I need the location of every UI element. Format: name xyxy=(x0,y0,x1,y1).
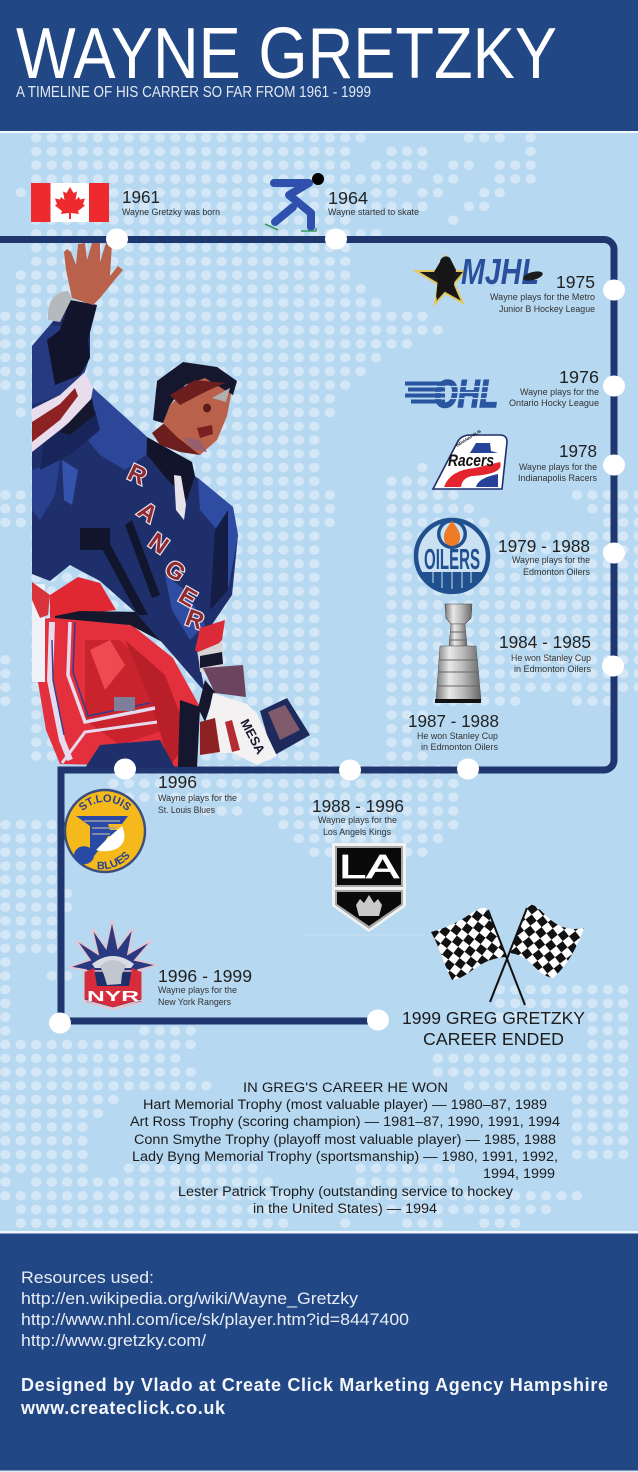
timeline entry: 1975: Junior B Hockey League xyxy=(499,304,595,314)
timeline entry: 1988-1996: 1988 - 1996 xyxy=(312,796,404,816)
logo: Indianapolis Racers xyxy=(433,428,507,489)
dark folds xyxy=(125,520,160,598)
collar xyxy=(147,437,195,500)
timeline entry: 1987-1988: 1987 - 1988 xyxy=(408,711,499,731)
icon: Stanley Cup xyxy=(435,604,481,703)
resources list: http://www.nhl.com/ice/sk/player.htm?id=8447400 xyxy=(21,1311,409,1329)
timeline entry: 1984-1985: in Edmonton Oilers xyxy=(514,664,591,674)
timeline entry: 1978: Indianapolis Racers xyxy=(518,473,597,483)
timeline entry: 1976 xyxy=(509,367,599,408)
text block: awards xyxy=(130,1080,561,1216)
logo: Edmonton Oilers xyxy=(416,519,488,592)
neck and beard xyxy=(152,416,200,455)
logo: Edmonton Oilers: OILERS xyxy=(424,544,480,576)
header banner xyxy=(0,0,638,133)
timeline entry: 1979-1988: 1979 - 1988 xyxy=(498,536,590,556)
timeline entry: 1984-1985 xyxy=(499,632,591,674)
neck lace xyxy=(174,475,186,520)
logo: LA Kings: LA xyxy=(339,848,399,885)
logo: New York Rangers xyxy=(69,920,157,1009)
text block: awards: Lester Patrick Trophy (outstanding service to hockey xyxy=(178,1184,513,1199)
timeline entry: 1976: Ontario Hocky League xyxy=(509,398,599,408)
timeline entry: 1996-1999: 1996 - 1999 xyxy=(158,966,252,986)
resources list xyxy=(21,1269,409,1350)
subtitle: A TIMELINE OF HIS CARRER SO FAR FROM 1961 - 1999 xyxy=(16,84,371,101)
timeline entry: 1996: 1996 xyxy=(158,772,197,792)
face xyxy=(163,377,233,455)
wrist xyxy=(203,665,246,697)
logo: MJHL xyxy=(416,251,544,304)
timeline entry: 1996-1999: New York Rangers xyxy=(158,997,231,1007)
title: WAYNE GRETZKY xyxy=(16,14,557,94)
footer panel xyxy=(0,1231,638,1472)
logo: New York Rangers: NYR xyxy=(87,988,139,1005)
text block: awards: in the United States) — 1994 xyxy=(253,1201,438,1216)
glove label: MESA xyxy=(237,716,269,757)
logo: OHL xyxy=(405,373,498,416)
hip xyxy=(50,577,116,618)
logo: Indianapolis Racers: INDIANAPOLIS xyxy=(455,428,482,448)
timeline entry: 1984-1985: 1984 - 1985 xyxy=(499,632,591,652)
timeline entry: 1978: 1978 xyxy=(559,441,597,461)
sleeve stripes xyxy=(32,372,93,452)
designer credit: www.createclick.co.uk xyxy=(20,1398,226,1418)
timeline entry: 1976: 1976 xyxy=(559,367,599,387)
background panel with dotted world map xyxy=(0,131,638,1233)
sleeve cuff xyxy=(195,620,225,658)
timeline entry: 1996-1999 xyxy=(158,966,252,1007)
timeline entry: 1996: Wayne plays for the xyxy=(158,793,237,803)
timeline entry: 1975: 1975 xyxy=(556,272,595,292)
timeline entry: 1979-1988 xyxy=(498,536,590,577)
resources list: http://www.gretzky.com/ xyxy=(21,1332,206,1350)
player illustration xyxy=(32,243,310,768)
logo: Indianapolis Racers: Racers xyxy=(448,451,494,470)
timeline entry: 1961: 1961 xyxy=(122,187,160,207)
elbow pad xyxy=(48,291,72,322)
text block: awards: IN GREG'S CAREER HE WON xyxy=(243,1080,448,1095)
timeline entry: 1996-1999: Wayne plays for the xyxy=(158,985,237,995)
icon: skater xyxy=(265,173,324,231)
timeline entry: 1996: St. Louis Blues xyxy=(158,805,215,815)
timeline entry: 1987-1988 xyxy=(408,711,499,752)
timeline track xyxy=(0,240,614,1021)
timeline entry: 1961: Wayne Gretzky was born xyxy=(122,207,220,217)
heading: career ended: CAREER ENDED xyxy=(423,1029,564,1049)
waypoint dots xyxy=(49,228,625,1034)
resources list: http://en.wikipedia.org/wiki/Wayne_Gretzky xyxy=(21,1290,359,1308)
jersey lettering: RANGER xyxy=(123,459,207,636)
timeline entry: 1988-1996: Wayne plays for the xyxy=(318,815,397,825)
icon: Canadian flag xyxy=(31,183,109,222)
hair xyxy=(153,362,237,423)
timeline entry: 1979-1988: Edmonton Oilers xyxy=(523,567,590,577)
timeline entry: 1984-1985: He won Stanley Cup xyxy=(511,653,591,663)
side panel xyxy=(32,584,45,682)
shoulder highlight xyxy=(75,388,147,470)
timeline entry: 1979-1988: Wayne plays for the xyxy=(512,555,590,565)
timeline entry: 1964: Wayne started to skate xyxy=(328,207,419,217)
jersey xyxy=(32,300,238,692)
text block: awards: Conn Smythe Trophy (playoff most valuable player) — 1985, 1988 xyxy=(134,1132,556,1147)
forearm xyxy=(47,300,97,385)
timeline entry: 1964: 1964 xyxy=(328,188,368,208)
timeline entry: 1987-1988: in Edmonton Oilers xyxy=(421,742,498,752)
heading: career ended xyxy=(402,1008,585,1049)
timeline entry: 1961 xyxy=(122,187,220,217)
resources list: Resources used: xyxy=(21,1269,154,1287)
divider under LA logo xyxy=(305,934,425,936)
designer credit: Designed by Vlado at Create Click Marketing Agency Hampshire xyxy=(21,1375,608,1395)
timeline entry: 1988-1996: Los Angels Kings xyxy=(323,827,391,837)
timeline entry: 1978: Wayne plays for the xyxy=(519,462,597,472)
logo: MJHL: MJHL xyxy=(461,251,539,292)
timeline entry: 1987-1988: He won Stanley Cup xyxy=(417,731,498,741)
text block: awards: 1994, 1999 xyxy=(483,1166,555,1181)
timeline entry: 1978 xyxy=(518,441,597,483)
logo: OHL: OHL xyxy=(434,373,498,416)
logo: LA Kings xyxy=(332,843,406,932)
heading: career ended: 1999 GREG GRETZKY xyxy=(402,1008,585,1028)
text block: awards: Hart Memorial Trophy (most valuable player) — 1980–87, 1989 xyxy=(143,1097,547,1112)
timeline entry: 1975 xyxy=(490,272,595,314)
shorts xyxy=(38,614,200,767)
timeline entry: 1996 xyxy=(158,772,237,815)
timeline entry: 1964 xyxy=(328,188,419,217)
hand xyxy=(64,243,123,305)
text block: awards: Lady Byng Memorial Trophy (sportsmanship) — 1980, 1991, 1992, xyxy=(132,1149,558,1164)
timeline entry: 1988-1996 xyxy=(312,796,404,837)
text block: awards: Art Ross Trophy (scoring champion) — 1981–87, 1990, 1991, 1994 xyxy=(130,1114,561,1129)
designer credit xyxy=(20,1375,608,1418)
timeline entry: 1976: Wayne plays for the xyxy=(520,387,599,397)
glove xyxy=(260,698,310,756)
logo: St. Louis Blues: ST.LOUIS xyxy=(79,794,131,810)
icon: checkered flags xyxy=(431,905,584,1005)
timeline entry: 1975: Wayne plays for the Metro xyxy=(490,292,595,302)
logo: St. Louis Blues: BLUES xyxy=(98,852,130,870)
logo: St. Louis Blues xyxy=(64,788,146,874)
